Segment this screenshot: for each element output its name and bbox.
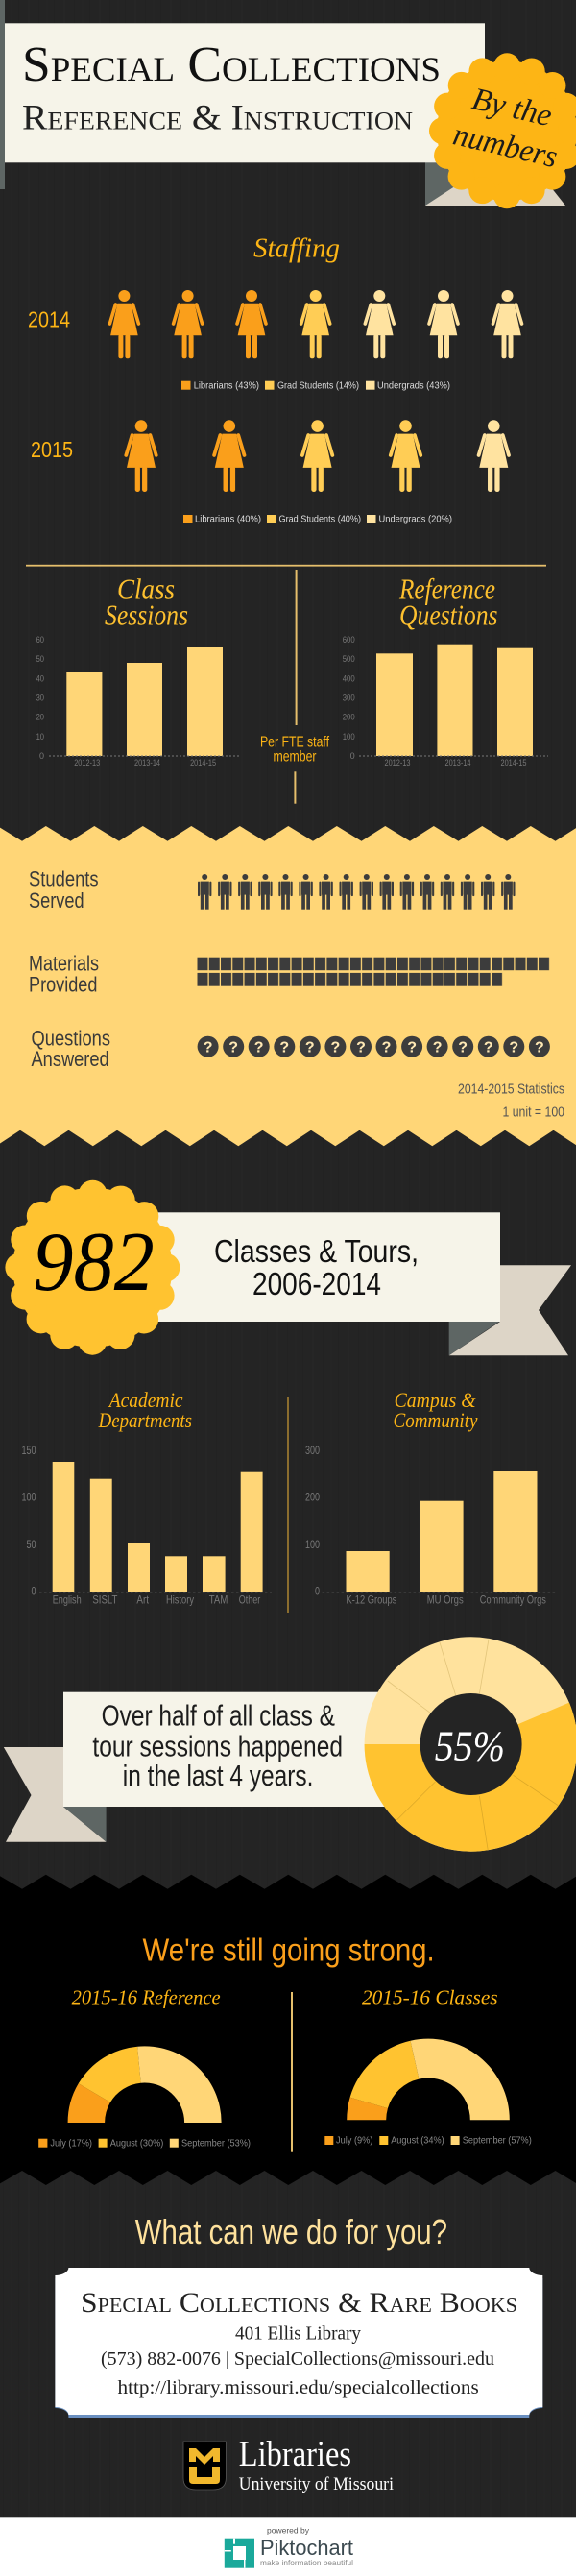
badge: 982: 982	[33, 1216, 155, 1309]
materials provided row: Provided	[29, 973, 97, 997]
questions answered row: ?	[305, 1039, 315, 1057]
bar chart: reference questions: 600	[343, 635, 355, 644]
staffing row 2015	[31, 420, 509, 492]
logo: MU Libraries: University of Missouri	[239, 2474, 394, 2494]
bar chart: reference questions: 300	[343, 693, 355, 703]
staffing row 2015: 2015	[31, 437, 73, 462]
title line 2: Reference & Instruction	[22, 98, 413, 137]
legend 2015: Librarians (40%)	[195, 513, 261, 524]
bar chart: reference questions: 2014-15	[501, 758, 526, 767]
heading: reference questions: Reference	[398, 571, 495, 605]
banner: over half: tour sessions happened	[92, 1729, 343, 1762]
bar chart: class sessions: 60	[36, 635, 44, 644]
header banner	[0, 0, 565, 206]
bar chart: class sessions: 50	[36, 654, 44, 664]
bar chart: academic departments: English	[53, 1592, 82, 1606]
legend: 2015-16 classes: July (9%)	[336, 2135, 372, 2147]
statistics note: 1 unit = 100	[503, 1106, 564, 1121]
staffing row 2014	[28, 290, 522, 358]
bar chart: campus and community: MU Orgs	[427, 1592, 464, 1606]
bar chart: academic departments: 150	[21, 1444, 36, 1457]
donut chart: 55%: 55%	[435, 1723, 505, 1770]
bar chart: class sessions: 40	[36, 673, 44, 683]
bar chart: campus and community: Community Orgs	[480, 1592, 546, 1606]
bar chart: reference questions: 400	[343, 673, 355, 683]
bar chart: academic departments	[21, 1444, 272, 1606]
bar chart: academic departments: 100	[21, 1491, 36, 1504]
bar chart: class sessions: 10	[36, 732, 44, 741]
students served row: Served	[29, 888, 84, 912]
legend: 2015-16 reference: July (17%)	[50, 2137, 92, 2149]
bar chart: reference questions: 2012-13	[384, 758, 411, 767]
contact card: 401 Ellis Library	[235, 2322, 361, 2344]
questions answered row: ?	[535, 1039, 544, 1057]
questions answered row: Questions	[31, 1026, 110, 1050]
bar chart: reference questions: 500	[343, 654, 355, 664]
heading: academic departments: Departments	[98, 1408, 192, 1432]
heading: still going strong: We're still going strong.	[142, 1932, 435, 1968]
questions answered row: ?	[356, 1039, 366, 1057]
footer: powered by Piktochart: Piktochart	[260, 2536, 353, 2560]
footer: powered by Piktochart: powered by	[267, 2526, 310, 2536]
badge: by the numbers: numbers	[450, 117, 561, 175]
bar chart: academic departments: 50	[27, 1538, 36, 1551]
footer: powered by Piktochart	[0, 2517, 576, 2576]
questions answered row: ?	[433, 1039, 442, 1057]
banner: classes and tours	[144, 1212, 571, 1355]
students served row	[29, 867, 515, 912]
contact card	[55, 2268, 542, 2418]
donut chart: 55%	[365, 1637, 576, 1852]
bar chart: campus and community: 300	[305, 1444, 320, 1457]
label: per FTE staff member: Per FTE staff	[260, 734, 329, 750]
questions answered row: ?	[331, 1039, 340, 1057]
legend 2014	[181, 379, 450, 391]
students served row: Students	[29, 867, 99, 891]
heading: reference questions	[398, 571, 497, 632]
heading: class sessions	[105, 571, 188, 632]
heading: campus and community: Campus &	[395, 1388, 476, 1412]
bar chart: reference questions	[343, 635, 548, 767]
heading: 2015-16 classes: 2015-16 Classes	[362, 1986, 498, 2009]
questions answered row: ?	[254, 1039, 264, 1057]
legend: 2015-16 reference	[38, 2137, 251, 2149]
heading: class sessions: Class	[117, 571, 175, 605]
banner: over half: in the last 4 years.	[123, 1759, 313, 1792]
badge: by the numbers: By the	[468, 82, 555, 134]
legend: 2015-16 classes: September (57%)	[463, 2135, 532, 2147]
bar chart: campus and community: K-12 Groups	[346, 1592, 396, 1606]
bar chart: class sessions: 2012-13	[74, 758, 100, 767]
bar chart: class sessions: 2013-14	[134, 758, 160, 767]
bar chart: reference questions: 0	[350, 751, 355, 761]
questions answered row: ?	[484, 1039, 493, 1057]
questions answered row: ?	[204, 1039, 212, 1057]
legend 2014: Undergrads (43%)	[377, 379, 450, 391]
bar chart: class sessions: 2014-15	[190, 758, 216, 767]
banner: over half: Over half of all class &	[102, 1699, 335, 1733]
heading: staffing: Staffing	[253, 233, 340, 264]
title line 1: Special Collections	[22, 37, 441, 92]
bar chart: academic departments: History	[166, 1592, 194, 1606]
legend 2014: Grad Students (14%)	[277, 379, 359, 391]
bar chart: academic departments: 0	[31, 1585, 36, 1598]
materials provided row: Materials	[29, 952, 99, 976]
questions answered row: ?	[407, 1039, 417, 1057]
logo: MU Libraries: Libraries	[239, 2435, 351, 2474]
bar chart: academic departments: TAM	[209, 1592, 228, 1606]
heading: academic departments	[98, 1388, 192, 1432]
legend: 2015-16 reference: August (30%)	[110, 2137, 163, 2149]
questions answered row: ?	[279, 1039, 289, 1057]
bar chart: class sessions: 30	[36, 693, 44, 703]
banner: over half	[4, 1692, 390, 1842]
questions answered row: ?	[382, 1039, 391, 1057]
bar chart: reference questions: 200	[343, 713, 355, 722]
bar chart: campus and community: 100	[305, 1538, 320, 1551]
bar chart: reference questions: 100	[343, 732, 355, 741]
label: per FTE staff member: member	[273, 749, 317, 766]
legend 2015: Undergrads (20%)	[378, 513, 452, 524]
bar chart: class sessions: 20	[36, 713, 44, 722]
icon: Piktochart logo	[225, 2539, 254, 2568]
legend: 2015-16 classes: August (34%)	[391, 2135, 444, 2147]
heading: class sessions: Sessions	[105, 598, 188, 632]
panel: black band	[0, 1875, 576, 2185]
heading: what can we do for you: What can we do for you?	[135, 2212, 447, 2251]
legend: 2015-16 reference: September (53%)	[181, 2137, 251, 2149]
statistics note	[458, 1082, 564, 1121]
bar chart: academic departments: SISLT	[92, 1592, 118, 1606]
bar chart: reference questions: 2013-14	[445, 758, 470, 767]
heading: reference questions: Questions	[399, 598, 497, 632]
badge: by the numbers	[437, 61, 576, 201]
banner: classes and tours: Classes & Tours,	[214, 1233, 419, 1269]
legend 2014: Librarians (43%)	[194, 379, 259, 391]
bar chart: class sessions	[36, 635, 239, 767]
bar chart: campus and community: 200	[305, 1491, 320, 1504]
banner: classes and tours: 2006-2014	[252, 1266, 381, 1301]
heading: campus and community: Community	[394, 1408, 478, 1432]
semi donut: 2015-16 reference	[68, 2046, 222, 2123]
legend 2015	[183, 513, 452, 524]
logo: MU Libraries	[183, 2435, 394, 2494]
questions answered row: ?	[228, 1039, 238, 1057]
contact card: http://library.missouri.edu/specialcollections	[117, 2377, 479, 2398]
bar chart: academic departments: Other	[239, 1592, 260, 1606]
heading: 2015-16 reference: 2015-16 Reference	[72, 1986, 221, 2009]
questions answered row: ?	[509, 1039, 518, 1057]
legend 2015: Grad Students (40%)	[278, 513, 361, 524]
contact card: (573) 882-0076 | SpecialCollections@missouri.edu	[101, 2348, 494, 2369]
heading: academic departments: Academic	[108, 1388, 183, 1412]
label: per FTE staff member	[260, 734, 329, 766]
bar chart: campus and community: 0	[315, 1585, 320, 1598]
legend: 2015-16 classes	[324, 2135, 532, 2147]
bar chart: class sessions: 0	[39, 751, 44, 761]
questions answered row	[31, 1026, 550, 1071]
contact card: Special Collections & Rare Books	[81, 2287, 517, 2319]
bar chart: academic departments: Art	[136, 1592, 150, 1606]
questions answered row: Answered	[31, 1047, 109, 1071]
questions answered row: ?	[458, 1039, 468, 1057]
bar chart: campus and community	[305, 1444, 556, 1606]
heading: campus and community	[394, 1388, 478, 1432]
badge: 982	[12, 1188, 172, 1348]
footer: powered by Piktochart: make information beautiful	[260, 2558, 353, 2567]
staffing row 2014: 2014	[28, 307, 70, 332]
panel: yellow statistics band	[0, 826, 576, 1146]
semi donut: 2015-16 classes	[347, 2039, 510, 2120]
materials provided row	[29, 952, 550, 997]
